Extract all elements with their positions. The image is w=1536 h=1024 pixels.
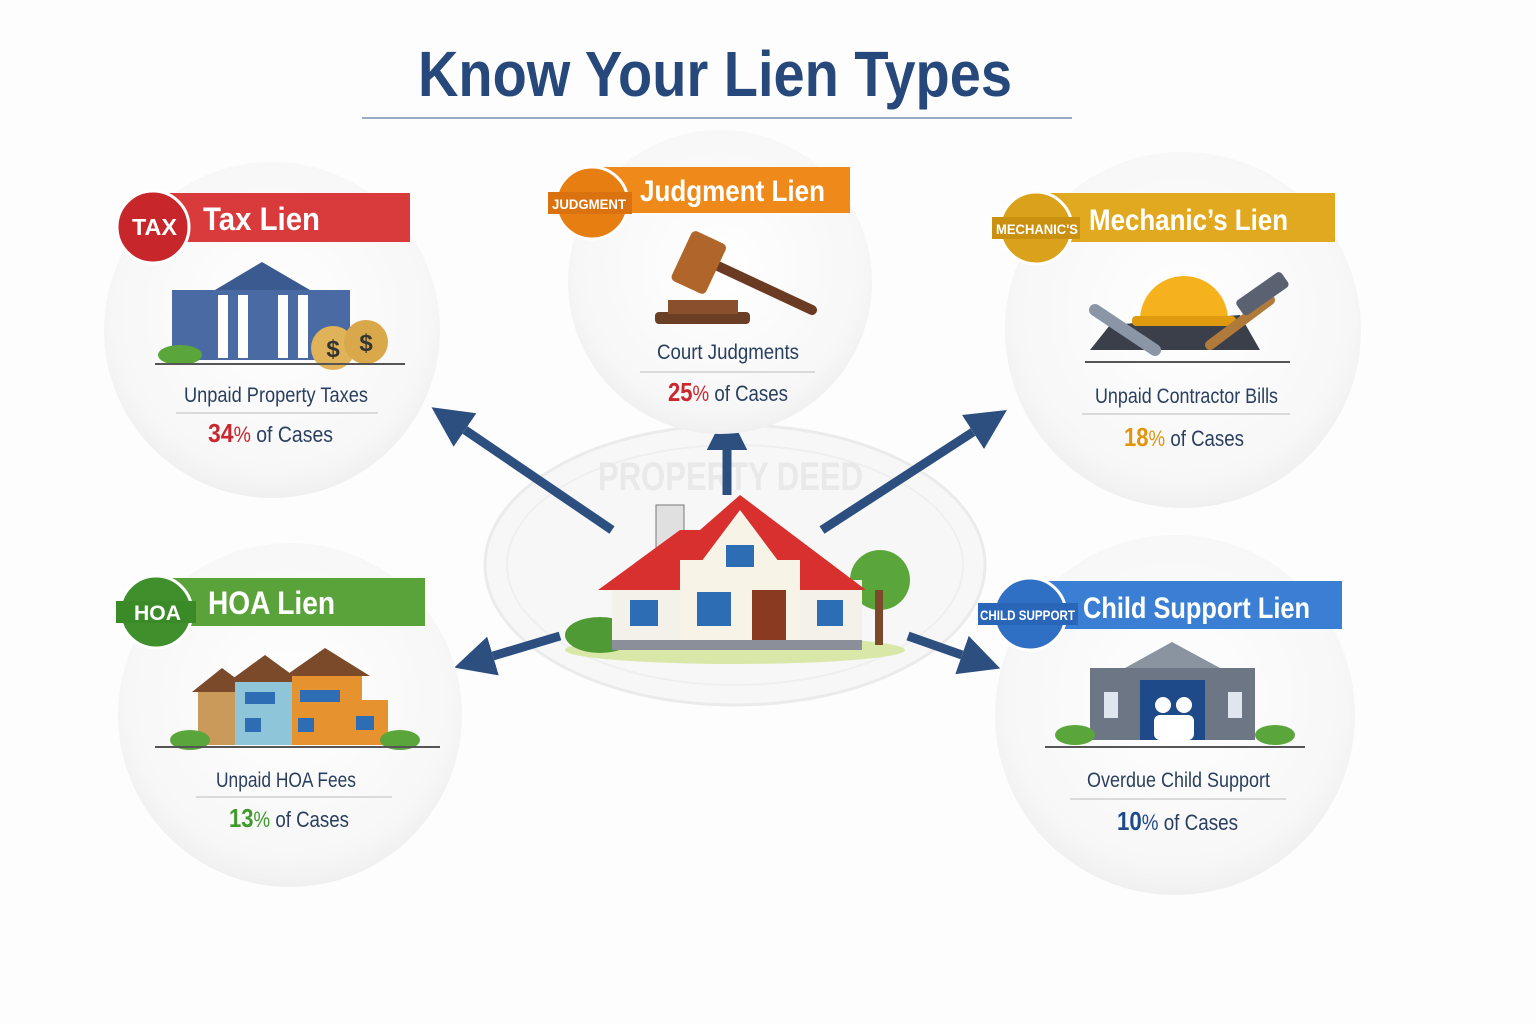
central house	[565, 495, 910, 664]
banner: tax: Tax Lien	[203, 201, 320, 237]
text: judgment	[640, 341, 815, 407]
banner: tax: TAX	[132, 214, 178, 240]
deed background	[485, 425, 985, 705]
text: mechanic's: 18% of Cases	[1124, 422, 1244, 452]
icon: building with family	[1045, 642, 1305, 747]
banner: judgment: Judgment Lien	[640, 175, 825, 208]
text: child support	[1070, 769, 1286, 836]
text: child support: Overdue Child Support	[1087, 769, 1270, 792]
icon: gavel	[655, 229, 812, 324]
banner: HOA: HOA	[134, 602, 181, 625]
text: judgment: Court Judgments	[657, 341, 799, 364]
panel: child support lien	[978, 535, 1355, 895]
text: child support: 10% of Cases	[1117, 806, 1238, 836]
panel: tax lien	[104, 162, 440, 498]
text: HOA: Unpaid HOA Fees	[216, 769, 356, 792]
banner: judgment: JUDGMENT	[552, 196, 626, 212]
text: mechanic's	[1082, 385, 1290, 452]
text: tax	[176, 384, 378, 448]
banner: mechanic's	[992, 192, 1335, 264]
banner: mechanic's: Mechanic’s Lien	[1089, 204, 1288, 237]
text: tax: 34% of Cases	[208, 418, 333, 448]
banner: child support: Child Support Lien	[1083, 592, 1310, 625]
banner: child support	[978, 578, 1342, 650]
banner: HOA: HOA Lien	[208, 585, 335, 621]
banner: mechanic's: MECHANIC'S	[996, 221, 1078, 237]
panel: HOA lien	[116, 543, 462, 887]
banner: tax	[117, 191, 410, 263]
panel: judgment lien	[548, 130, 872, 434]
banner: HOA	[116, 576, 425, 648]
text: HOA	[196, 769, 392, 833]
banner: child support: CHILD SUPPORT	[980, 607, 1075, 623]
icon: courthouse with money bags: $	[359, 330, 373, 357]
banner: judgment	[548, 167, 850, 239]
icon: courthouse with money bags: $	[326, 336, 340, 363]
icon: row houses	[155, 648, 440, 750]
panel: mechanic's lien	[992, 152, 1361, 508]
text: tax: Unpaid Property Taxes	[184, 384, 368, 407]
icon: tools and hard hat	[1085, 271, 1290, 362]
text: mechanic's: Unpaid Contractor Bills	[1095, 385, 1278, 408]
arrows	[465, 430, 973, 656]
text: HOA: 13% of Cases	[229, 803, 349, 833]
text: judgment: 25% of Cases	[668, 377, 788, 407]
deed background: PROPERTY DEED	[598, 455, 863, 499]
title: Know Your Lien Types	[418, 38, 1012, 110]
icon: courthouse with money bags	[155, 262, 405, 370]
